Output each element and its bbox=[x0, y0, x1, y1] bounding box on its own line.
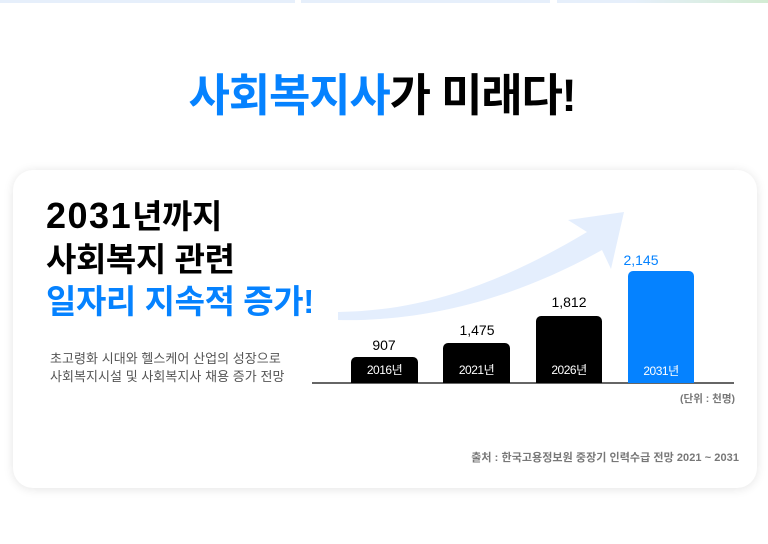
unit note: (단위 : 천명) bbox=[680, 393, 735, 405]
heading bbox=[46, 195, 314, 320]
bar: 2021: 2021년 bbox=[459, 363, 494, 377]
top decorative strips bbox=[0, 0, 768, 3]
axis line bbox=[312, 382, 734, 384]
heading: 사회복지 관련 bbox=[46, 240, 235, 278]
description text: 사회복지시설 및 사회복지사 채용 증가 전망 bbox=[50, 369, 284, 384]
heading: 2031년까지 bbox=[46, 195, 222, 236]
value: 1,475: 1,475 bbox=[459, 322, 495, 338]
bar: 2021 bbox=[443, 343, 510, 383]
source note: 출처 : 한국고용정보원 중장기 인력수급 전망 2021 ~ 2031 bbox=[471, 452, 739, 464]
description text bbox=[50, 351, 284, 384]
description text: 초고령화 시대와 헬스케어 산업의 성장으로 bbox=[50, 351, 281, 366]
value: 2,145: 2,145 bbox=[623, 252, 659, 268]
value: 1,812: 1,812 bbox=[551, 294, 587, 310]
bar: 2026 bbox=[536, 316, 602, 383]
bar: 2031: 2031년 bbox=[643, 364, 679, 378]
title: 사회복지사가 미래다! bbox=[189, 70, 575, 121]
heading: 일자리 지속적 증가! bbox=[46, 283, 314, 320]
bar chart bbox=[312, 252, 734, 384]
bar: 2016 bbox=[351, 357, 418, 383]
value: 907: 907 bbox=[372, 337, 396, 353]
bar: 2026: 2026년 bbox=[551, 363, 587, 377]
panel: job growth card bbox=[13, 170, 757, 488]
bar: 2016: 2016년 bbox=[367, 363, 402, 377]
bar: 2031 bbox=[628, 271, 694, 383]
